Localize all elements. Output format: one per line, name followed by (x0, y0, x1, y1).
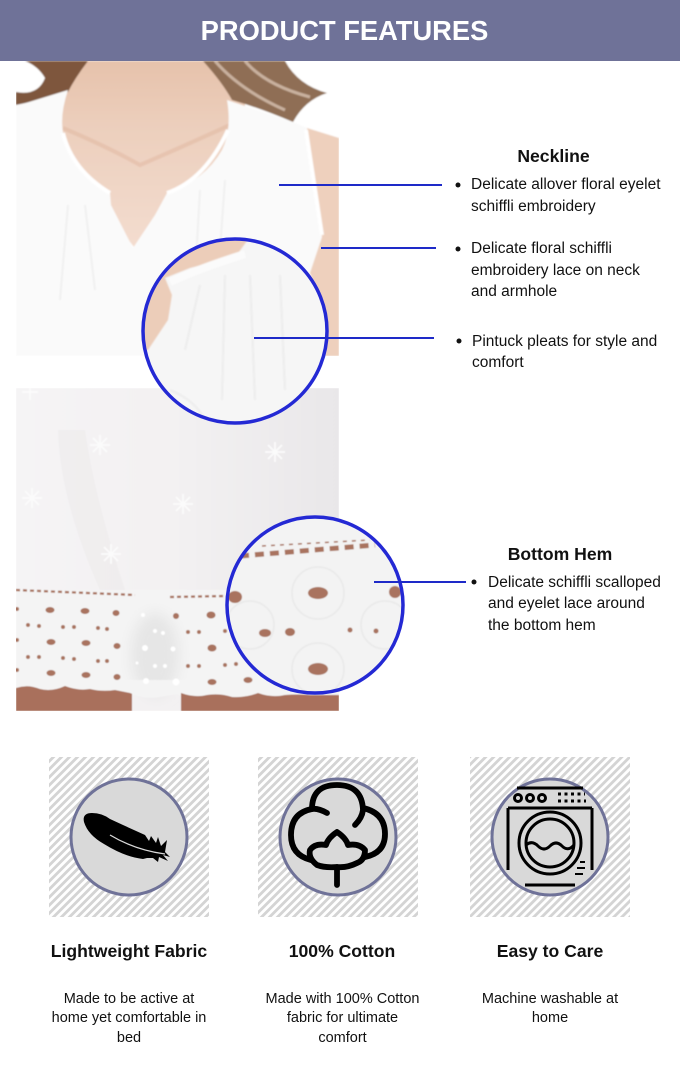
zoom circle: scalloped eyelet lace (225, 515, 409, 695)
description: easy to care: Machine washable at (482, 991, 618, 1007)
bullet: lace on neck and armhole (456, 240, 640, 300)
photo: neckline of white blouse (16, 61, 339, 356)
icon: washing machine (508, 788, 592, 885)
feature: easy to care (470, 757, 630, 1026)
description: cotton: fabric for ultimate (287, 1010, 398, 1026)
description: easy to care (482, 991, 618, 1026)
description: cotton (266, 991, 419, 1046)
bullet: eyelet embroidery (456, 176, 661, 215)
bullet: pintuck pleats: Pintuck pleats for style and (472, 333, 657, 350)
bullet: eyelet embroidery: schiffli embroidery (471, 198, 596, 215)
description: lightweight fabric: Made to be active at (64, 991, 194, 1007)
bullet: lace on neck and armhole: Delicate floral schiffli (471, 240, 612, 257)
description: lightweight fabric: home yet comfortable in (52, 1010, 206, 1026)
bullet: eyelet embroidery: Delicate allover floral eyelet (471, 176, 661, 193)
icon: feather (84, 813, 170, 862)
heading: cotton: 100% Cotton (289, 941, 395, 961)
title: PRODUCT FEATURES (201, 15, 488, 46)
neckline heading: Neckline (517, 146, 590, 166)
bottom hem heading: Bottom Hem (508, 544, 612, 564)
heading: easy to care: Easy to Care (497, 941, 604, 961)
heading: lightweight fabric: Lightweight Fabric (51, 941, 207, 961)
zoom circle: pintuck pleats (135, 230, 330, 426)
bullet: scalloped lace: the bottom hem (488, 617, 596, 634)
callout lines (254, 185, 466, 582)
bullet: scalloped lace (472, 574, 661, 634)
neckline text block (456, 146, 661, 371)
bullet: lace on neck and armhole: embroidery lace on neck (471, 262, 640, 279)
bullet: pintuck pleats (456, 333, 657, 371)
feature: lightweight fabric (49, 757, 209, 1046)
bullet: scalloped lace: Delicate schiffli scalloped (488, 574, 661, 591)
header banner (0, 0, 680, 61)
description: lightweight fabric: bed (117, 1030, 141, 1046)
description: cotton: comfort (318, 1030, 367, 1046)
description: lightweight fabric (52, 991, 206, 1046)
description: cotton: Made with 100% Cotton (266, 991, 419, 1007)
bullet: scalloped lace: and eyelet lace around (488, 595, 645, 612)
bullet: lace on neck and armhole: and armhole (471, 283, 557, 300)
description: easy to care: home (532, 1010, 568, 1026)
bottom hem text block (472, 544, 661, 634)
feature: cotton (258, 757, 419, 1046)
icon: cotton boll (291, 785, 385, 885)
photo: bottom hem with eyelet lace (15, 384, 339, 711)
bullet: pintuck pleats: comfort (472, 354, 524, 371)
